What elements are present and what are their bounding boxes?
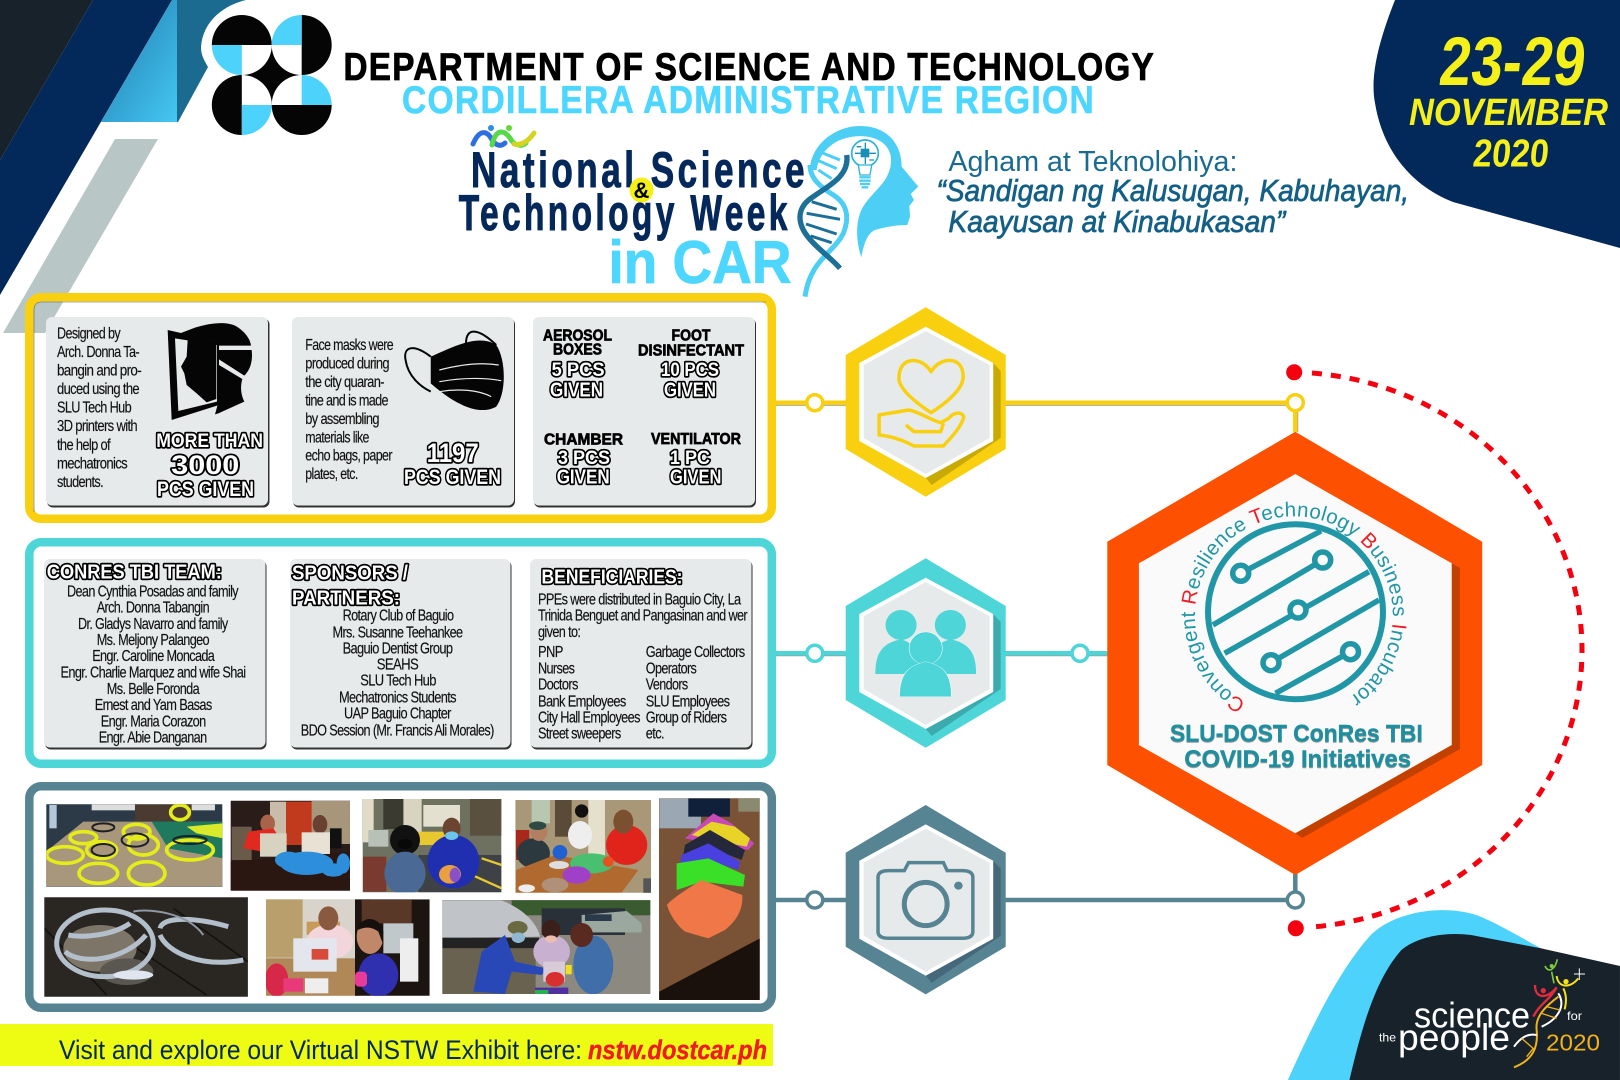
text: sponsor names: Rotary Club of Baguio xyxy=(343,608,454,625)
text: face mask description: the city quaran- xyxy=(305,374,384,391)
heading: National Science & Technology Week in CAR: & xyxy=(634,178,650,203)
text: face mask description xyxy=(305,337,394,483)
text: team names: Arch. Donna Tabangin xyxy=(97,600,209,616)
theme text: Kaayusan at Kinabukasan” xyxy=(948,204,1287,239)
date text xyxy=(1409,22,1609,175)
text: face mask description: echo bags, paper xyxy=(305,448,393,465)
title: department: DEPARTMENT OF SCIENCE AND TECHNOLOGY xyxy=(344,46,1155,89)
stat: aerosol boxes: GIVEN xyxy=(550,380,603,402)
panel: photos xyxy=(29,786,772,1008)
heading: team: CONRES TBI TEAM: xyxy=(47,562,222,584)
text: face shield description xyxy=(57,326,141,491)
icon: heart in hand xyxy=(879,360,964,446)
text: face shield description: SLU Tech Hub xyxy=(57,400,132,417)
text: face mask description: tine and is made xyxy=(305,392,389,409)
photo: mask makers at table xyxy=(515,800,651,893)
callout: virtual exhibit banner: nstw.dostcar.ph xyxy=(588,1035,767,1065)
hexagon: camera xyxy=(846,805,1006,994)
text: beneficiaries list: Garbage Collectors xyxy=(646,644,745,661)
stat: chamber: CHAMBER xyxy=(544,432,623,449)
corner shape: bottom right xyxy=(1288,910,1620,1080)
text: face mask description: by assembling xyxy=(305,411,379,428)
stat: ventilator: VENTILATOR xyxy=(651,431,741,448)
text: beneficiaries list: Trinida Benguet and Pangasinan and wer xyxy=(538,607,748,624)
heading: National Science & Technology Week in CAR: Technology Week xyxy=(459,185,791,241)
stat: chamber xyxy=(544,432,623,488)
text: face shield description: mechatronics xyxy=(57,456,128,472)
stat: more than 3000 pcs: 3000 xyxy=(171,450,239,480)
subtitle: region: CORDILLERA ADMINISTRATIVE REGION xyxy=(402,79,1095,122)
icon: camera xyxy=(878,863,973,938)
text: team names xyxy=(60,583,246,746)
callout: virtual exhibit banner: Visit and explore our Virtual NSTW Exhibit here: xyxy=(59,1035,582,1065)
text: sponsor names: UAP Baguio Chapter xyxy=(344,706,452,723)
icon: circuit circle xyxy=(1208,524,1383,699)
stat: ventilator: 1 PC xyxy=(670,448,710,469)
logo: science for the people 2020: science xyxy=(1414,994,1530,1035)
text: initiative title: COVID-19 Initiatives xyxy=(1184,746,1411,773)
text: team names: Engr. Caroline Moncada xyxy=(92,648,215,665)
text: team names: Ms. Belle Foronda xyxy=(107,681,200,698)
text: beneficiaries list: Street sweepers xyxy=(538,726,621,743)
theme text: “Sandigan ng Kalusugan, Kabuhayan, xyxy=(936,173,1409,208)
panel: PPE items xyxy=(29,297,772,519)
text: sponsor names: BDO Session (Mr. Francis Ali Morales) xyxy=(301,723,494,740)
connector: teal xyxy=(776,645,1108,662)
heading: National Science & Technology Week in CAR: National Science xyxy=(471,142,808,198)
text: sponsor names: SEAHS xyxy=(377,657,418,674)
photo: two women with masks xyxy=(362,799,502,892)
heading: National Science & Technology Week in CAR xyxy=(459,142,808,296)
logo: science for the people 2020: people xyxy=(1398,1017,1510,1058)
card: face shields xyxy=(46,317,270,508)
dashed arc: red xyxy=(1286,364,1582,936)
text: beneficiaries list: Operators xyxy=(646,660,697,677)
text: face shield description: the help of xyxy=(57,437,111,454)
text: team names: Engr. Abie Danganan xyxy=(99,730,206,746)
photo: distribution outdoors xyxy=(442,900,650,994)
stat: aerosol boxes: BOXES xyxy=(553,341,602,358)
text: sponsor names: Mechatronics Students xyxy=(339,689,457,706)
text: face mask description: materials like xyxy=(305,429,369,446)
text: sponsor names: Baguio Dentist Group xyxy=(343,641,453,658)
theme text xyxy=(936,146,1409,239)
photo: white face shield frames xyxy=(44,897,248,997)
text: initiative title xyxy=(1170,720,1423,773)
heading: National Science & Technology Week in CAR: in CAR xyxy=(608,229,792,296)
photo: yellow face shield frames xyxy=(46,804,222,887)
text: face shield description: bangin and pro- xyxy=(57,362,141,380)
callout: virtual exhibit banner xyxy=(0,1024,773,1066)
text: team names: Dean Cynthia Posadas and family xyxy=(67,583,239,600)
text: beneficiaries list: Nurses xyxy=(538,660,575,677)
card: ConRes TBI team xyxy=(44,559,266,750)
card: beneficiaries xyxy=(530,559,752,750)
text: beneficiaries list: PNP xyxy=(538,644,563,661)
text: beneficiaries list: Bank Employees xyxy=(538,693,626,710)
photo: sewing at table xyxy=(230,800,350,891)
text: face shield description: duced using the xyxy=(57,381,140,398)
stat: chamber: 3 PCS xyxy=(558,448,610,469)
text: team names: Ernest and Yam Basas xyxy=(95,697,212,714)
heading: beneficiaries: BENEFICIARIES: xyxy=(542,567,682,589)
stat: foot disinfectant xyxy=(638,328,744,402)
text: beneficiaries list: Doctors xyxy=(538,677,578,694)
theme text: Agham at Teknolohiya: xyxy=(948,146,1237,178)
hexagon: heart and hand xyxy=(846,307,1006,497)
text: beneficiaries list: Vendors xyxy=(646,677,688,694)
text: face shield description: students. xyxy=(57,474,103,491)
connector: yellow xyxy=(776,395,1304,432)
icon: NSTW ribbon mark xyxy=(473,125,534,145)
stat: ventilator xyxy=(651,431,741,488)
text: face mask description: Face masks were xyxy=(305,337,394,354)
logo: science for the people 2020: the xyxy=(1379,1031,1396,1045)
card: other equipment xyxy=(533,317,756,508)
logo: science for the people 2020 xyxy=(1379,959,1600,1067)
stat: more than 3000 pcs xyxy=(156,431,263,501)
stat: aerosol boxes: 5 PCS xyxy=(552,360,605,381)
stat: foot disinfectant: FOOT xyxy=(672,328,711,344)
hexagon: people xyxy=(846,558,1006,748)
connector: slate xyxy=(776,874,1303,908)
text: team names: Engr. Charlie Marquez and wife Shai xyxy=(60,664,246,682)
stat: ventilator: GIVEN xyxy=(670,466,721,488)
text: curved incubator name: Convergent Resilience Technology Business Incubator xyxy=(1182,502,1406,712)
logo: science for the people 2020: for xyxy=(1567,1009,1582,1023)
text: beneficiaries list: PPEs were distributed in Baguio City, La xyxy=(538,592,741,609)
stat: aerosol boxes: AEROSOL xyxy=(543,328,612,344)
heading: sponsors xyxy=(292,562,408,610)
date text: 2020 xyxy=(1471,133,1551,175)
text: sponsor names: Mrs. Susanne Teehankee xyxy=(332,624,463,641)
icon: face mask xyxy=(405,332,504,410)
text: team names: Engr. Maria Corazon xyxy=(101,714,206,730)
central hexagon: ConRes TBI xyxy=(1107,432,1482,875)
icon: three people xyxy=(875,610,976,697)
text: beneficiaries list: etc. xyxy=(646,726,664,743)
text: face mask description: produced during xyxy=(305,356,389,372)
stat: more than 3000 pcs: MORE THAN xyxy=(156,431,263,452)
stat: 1197 pcs: PCS GIVEN xyxy=(404,466,501,489)
text: beneficiaries list: City Hall Employees xyxy=(538,709,640,726)
stat: aerosol boxes xyxy=(543,328,612,402)
text: team names: Ms. Meljony Palangeo xyxy=(97,632,210,649)
stat: 1197 pcs xyxy=(404,438,501,489)
text: beneficiaries list xyxy=(538,592,748,743)
corner shapes: top left xyxy=(0,0,246,333)
text: initiative title: SLU-DOST ConRes TBI xyxy=(1170,720,1423,748)
date panel xyxy=(1374,0,1620,248)
photo: man sewing with woman xyxy=(266,899,430,996)
heading: sponsors: PARTNERS: xyxy=(292,588,400,610)
stat: foot disinfectant: GIVEN xyxy=(664,380,716,402)
stat: more than 3000 pcs: PCS GIVEN xyxy=(157,478,254,501)
date text: 23-29 xyxy=(1436,22,1590,100)
stat: chamber: GIVEN xyxy=(557,466,610,488)
logo: science for the people 2020: 2020 xyxy=(1546,1030,1600,1056)
icon: DOST logo xyxy=(212,15,332,135)
card: face masks xyxy=(292,317,515,508)
text: face shield description: Designed by xyxy=(57,326,121,342)
card: sponsors and partners xyxy=(290,559,512,750)
stat: 1197 pcs: 1197 xyxy=(427,438,479,468)
text: face shield description: 3D printers with xyxy=(57,418,137,435)
heading: sponsors: SPONSORS / xyxy=(292,562,408,584)
panel: people xyxy=(29,542,772,764)
text: sponsor names: SLU Tech Hub xyxy=(360,673,437,690)
photo: coloured masks on wood xyxy=(659,798,760,1000)
text: face shield description: Arch. Donna Ta- xyxy=(57,344,139,361)
text: beneficiaries list: Group of Riders xyxy=(646,709,727,726)
stat: foot disinfectant: 10 PCS xyxy=(661,360,719,381)
icon: head with DNA and light bulb xyxy=(800,126,918,297)
stat: foot disinfectant: DISINFECTANT xyxy=(638,342,744,360)
text: sponsor names xyxy=(301,608,494,740)
text: team names: Dr. Gladys Navarro and family xyxy=(78,616,228,633)
icon: face shield xyxy=(168,323,252,420)
text: beneficiaries list: SLU Employees xyxy=(646,693,730,710)
text: face mask description: plates, etc. xyxy=(305,466,358,483)
text: beneficiaries list: given to: xyxy=(538,624,580,641)
